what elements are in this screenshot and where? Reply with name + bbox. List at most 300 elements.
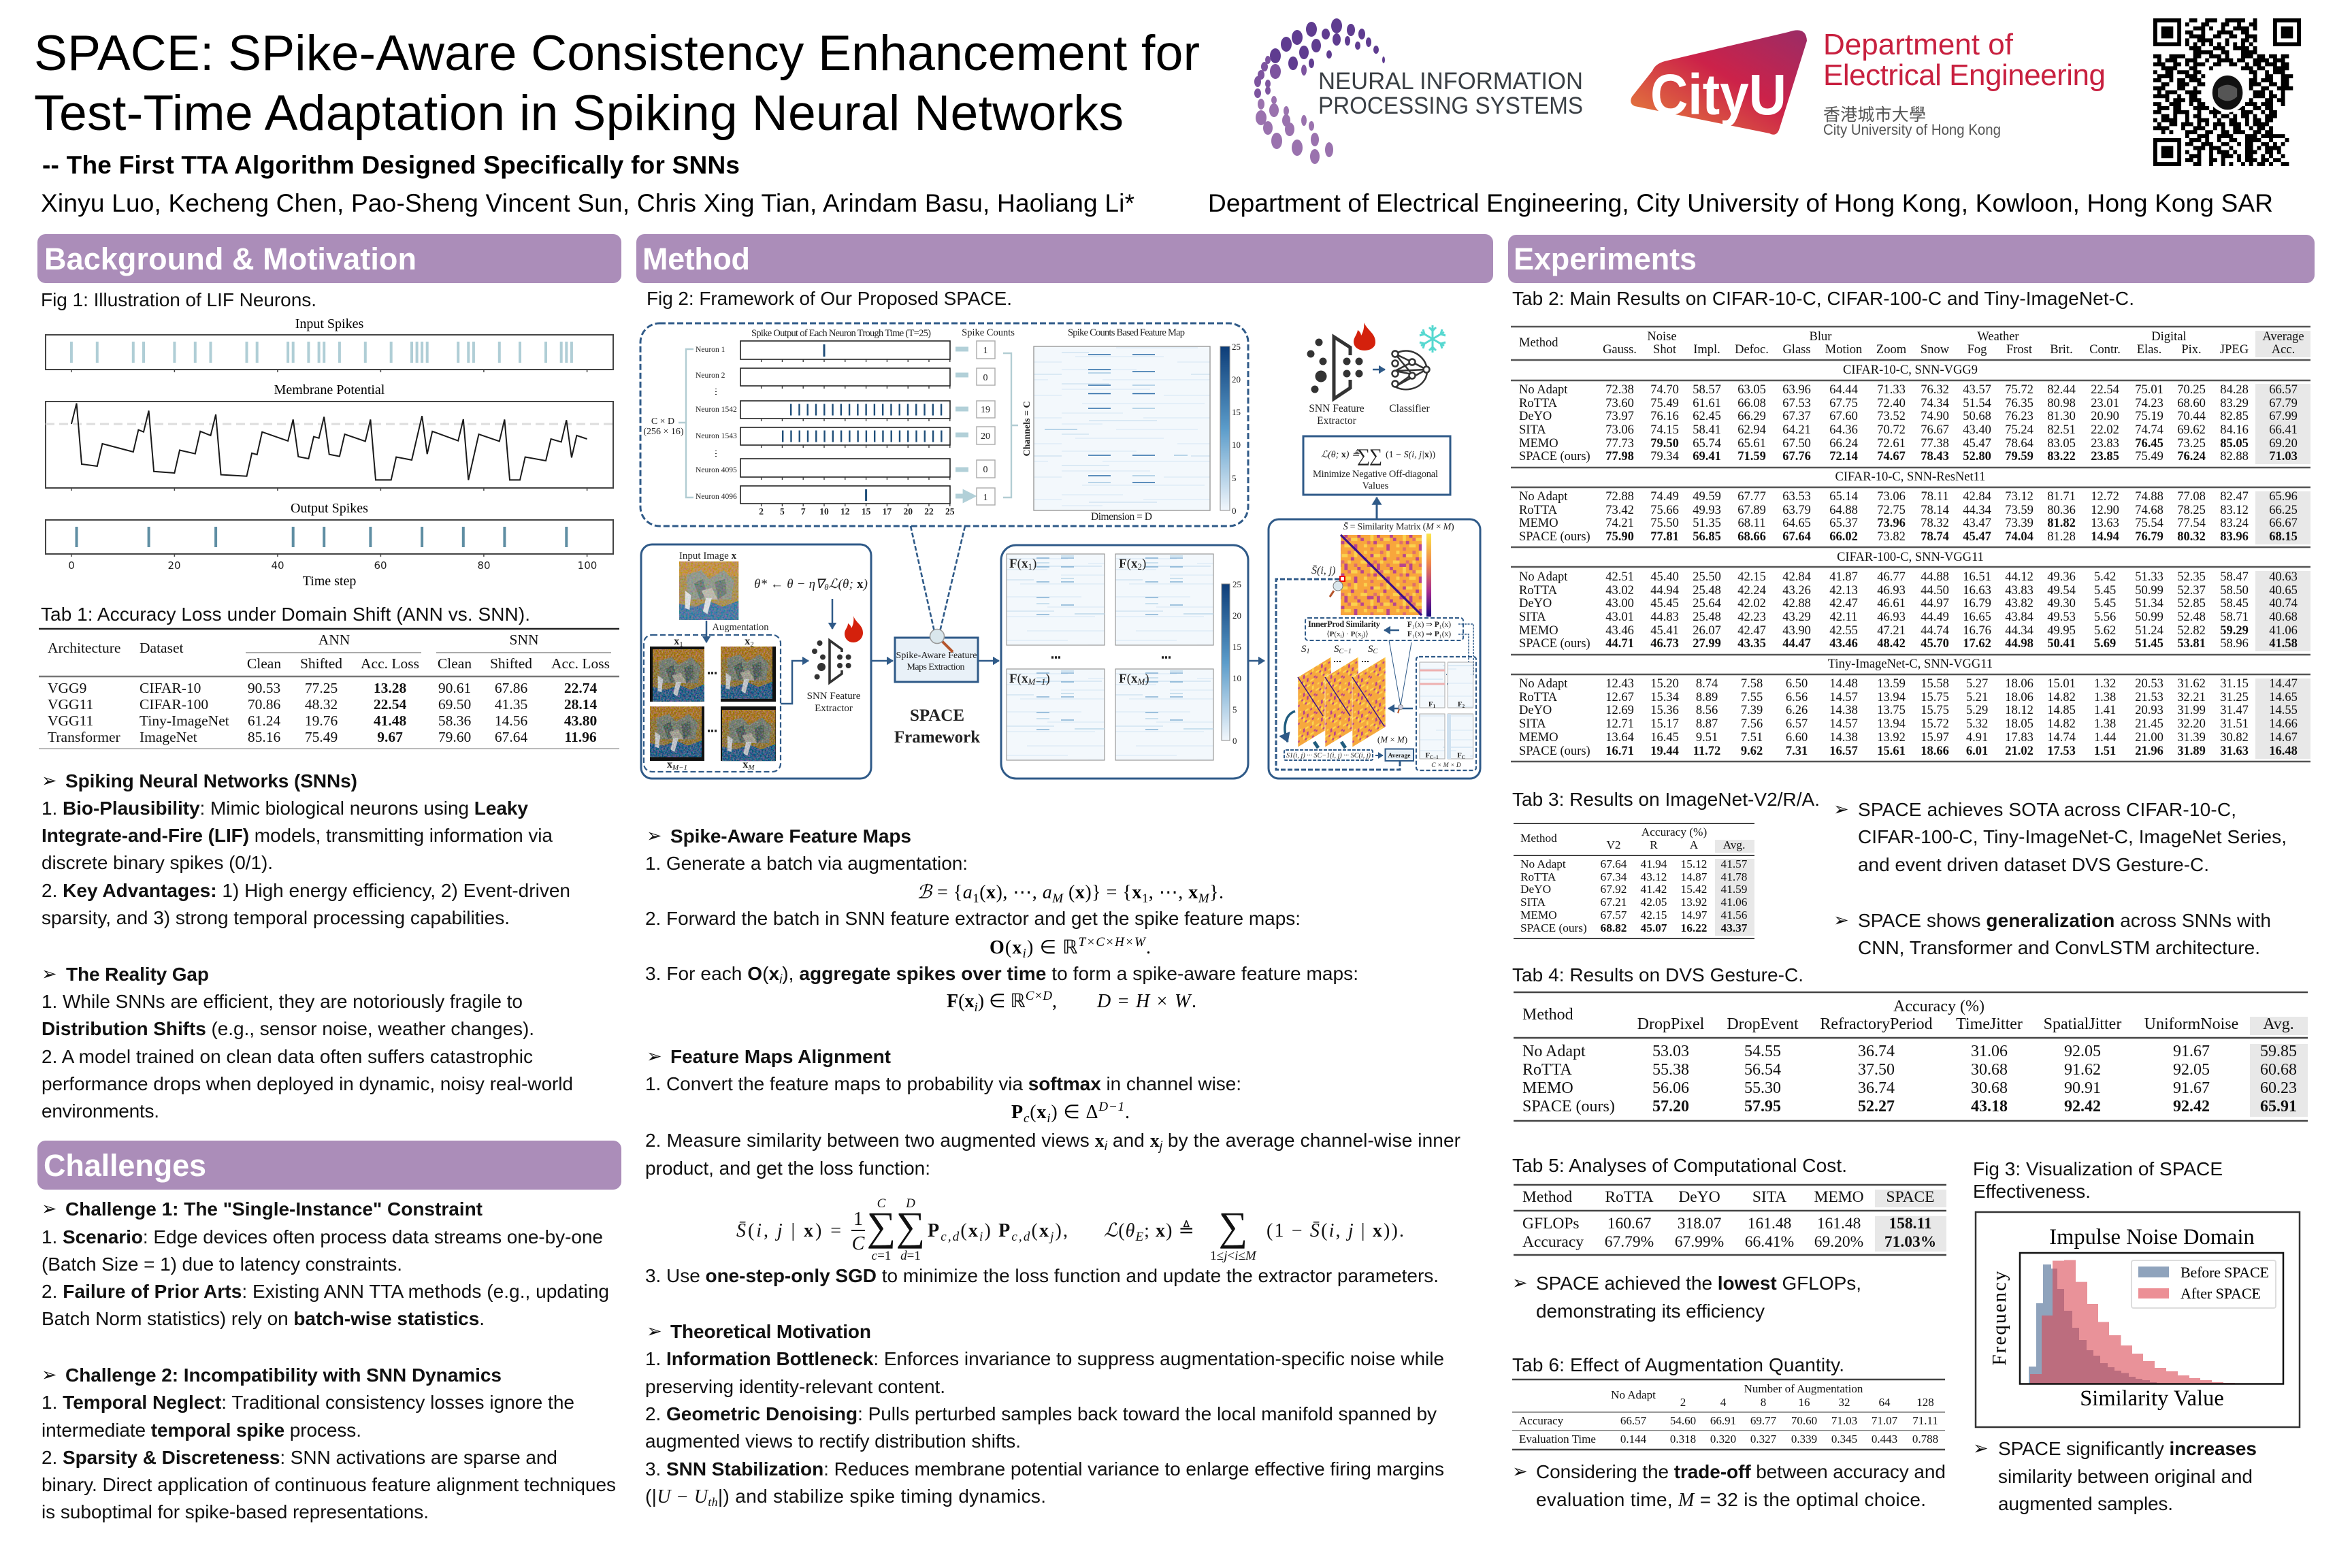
block: CIFAR-10-C VGG9: 76.35 bbox=[2005, 397, 2034, 410]
table 1: Architecture bbox=[48, 640, 120, 656]
text block: experiment findings: ➢ bbox=[1833, 799, 1849, 820]
text block: Spike-Aware Feature Maps: aggregate spikes over time to form a spike-aware feature maps: bbox=[799, 963, 1358, 984]
block: CIFAR-10-C ResNet11: 72.88 bbox=[1605, 490, 1634, 504]
text block: Challenge 2: Challenge 2: Incompatibility with SNN Dynamics bbox=[65, 1365, 502, 1386]
table 6: 128 bbox=[1916, 1396, 1934, 1409]
block: CIFAR-10-C VGG9: SPACE (ours) bbox=[1519, 450, 1590, 463]
table 3: 15.42 bbox=[1681, 883, 1707, 896]
table 3: 67.92 bbox=[1601, 883, 1627, 896]
table 2: Acc. bbox=[2272, 343, 2295, 357]
table 3 bbox=[1514, 823, 1754, 938]
block: CIFAR-100-C VGG11: 58.96 bbox=[2220, 637, 2249, 651]
table 2 bbox=[1511, 327, 2310, 762]
text block: Challenge 2: ➢ bbox=[42, 1365, 57, 1386]
text block: The Reality Gap: performance drops when deployed in dynamic, noisy real-world bbox=[42, 1073, 573, 1094]
panel: augmentation: Extractor bbox=[815, 703, 853, 714]
text block: Spike-Aware Feature Maps: }. bbox=[1209, 882, 1224, 903]
block: CIFAR-100-C VGG11: 42.47 bbox=[1737, 624, 1766, 638]
text block: Theoretical Motivation: 3. SNN Stabilization: Reduces membrane potential variance to enlarge effective firing margins bbox=[645, 1458, 1444, 1480]
table 5: MEMO bbox=[1814, 1188, 1864, 1206]
block: CIFAR-10-C VGG9: 73.60 bbox=[1605, 397, 1634, 410]
block: CIFAR-100-C VGG11: 40.63 bbox=[2269, 570, 2298, 584]
equation: similarity and loss: ; bbox=[1144, 1220, 1155, 1241]
block: CIFAR-10-C VGG9: 45.47 bbox=[1963, 437, 1991, 451]
panel: feature maps: ) bbox=[1142, 557, 1146, 571]
table 4: 57.20 bbox=[1652, 1098, 1689, 1115]
panel: spike output detail: 20 bbox=[981, 431, 990, 442]
table 5: 160.67 bbox=[1607, 1215, 1652, 1232]
table 3: 41.94 bbox=[1641, 858, 1667, 870]
box: loss: ∑ bbox=[1357, 445, 1370, 466]
block: CIFAR-100-C VGG11: 25.64 bbox=[1693, 597, 1721, 610]
panel: spike output detail bbox=[640, 323, 1248, 526]
block: CIFAR-10-C VGG9: 75.49 bbox=[2135, 450, 2163, 463]
header: Experiments: Experiments bbox=[1514, 242, 1697, 276]
block: CIFAR-100-C VGG11 bbox=[1519, 570, 2298, 651]
block: CIFAR-10-C VGG9: 67.75 bbox=[1829, 397, 1858, 410]
panel: augmentation: M bbox=[747, 764, 755, 772]
equation: similarity and loss: x bbox=[1039, 1220, 1049, 1241]
table 4: 92.05 bbox=[2173, 1061, 2210, 1079]
panel: spike output detail: 10 bbox=[819, 506, 829, 517]
table 6: 69.77 bbox=[1750, 1414, 1777, 1427]
table 4: 30.68 bbox=[1971, 1079, 2008, 1097]
text block: Feature Maps Alignment: 3. Use one-step-only SGD to minimize the loss function and update the extractor parameters. bbox=[645, 1265, 1439, 1286]
icons: feature extractor and classifier: Extractor bbox=[1317, 415, 1357, 427]
block: CIFAR-10-C VGG9: 76.16 bbox=[1650, 410, 1679, 423]
block: CIFAR-100-C VGG11: 25.48 bbox=[1693, 610, 1721, 624]
text block: Feature Maps Alignment: c bbox=[1024, 1111, 1030, 1126]
block: Tiny-ImageNet-C VGG11: 31.99 bbox=[2177, 704, 2206, 717]
table 3: 45.07 bbox=[1641, 921, 1667, 934]
block: Tiny-ImageNet-C VGG11: 31.39 bbox=[2177, 731, 2206, 745]
block: CIFAR-10-C VGG9: 71.59 bbox=[1737, 450, 1766, 463]
table 4: 60.23 bbox=[2260, 1079, 2297, 1097]
text block: Challenge 1: ➢ bbox=[42, 1198, 57, 1220]
panel: spike output detail: 1 bbox=[983, 346, 988, 356]
block: CIFAR-100-C VGG11: 42.15 bbox=[1737, 570, 1766, 584]
text block: Spiking Neural Networks: 1. Bio-Plausibility: Mimic biological neurons using Leaky bbox=[42, 798, 528, 819]
panel: similarity matrix: (M × M) bbox=[1377, 734, 1407, 745]
block: CIFAR-100-C VGG11: 58.71 bbox=[2220, 610, 2249, 624]
table 4: 92.05 bbox=[2064, 1043, 2101, 1060]
block: CIFAR-10-C ResNet11: 14.94 bbox=[2091, 530, 2119, 544]
block: CIFAR-10-C ResNet11: 78.32 bbox=[1921, 517, 1949, 530]
block: CIFAR-100-C VGG11: 42.47 bbox=[1829, 597, 1858, 610]
panel: augmentation: x bbox=[745, 636, 750, 647]
table 2: CIFAR-100-C, SNN-VGG11 bbox=[1837, 551, 1984, 564]
table 2: Elas. bbox=[2137, 343, 2161, 357]
block: CIFAR-100-C VGG11: 43.26 bbox=[1782, 584, 1811, 598]
text block: Spike-Aware Feature Maps: 1 bbox=[973, 892, 979, 906]
block: CIFAR-10-C VGG9 bbox=[1519, 383, 2298, 463]
block: Tiny-ImageNet-C VGG11: 19.44 bbox=[1650, 745, 1679, 758]
block: CIFAR-100-C VGG11: 44.34 bbox=[2005, 624, 2034, 638]
block: Tiny-ImageNet-C VGG11: 15.20 bbox=[1650, 677, 1679, 691]
equation: aggregated feature map: ) ∈ ℝ bbox=[978, 991, 1026, 1012]
equation: similarity and loss: E bbox=[1134, 1230, 1143, 1244]
block: CIFAR-10-C VGG9: 74.74 bbox=[2135, 423, 2163, 437]
text block: trade-off note: Considering the trade-off between accuracy and bbox=[1536, 1461, 1946, 1482]
block: Tiny-ImageNet-C VGG11: 17.83 bbox=[2005, 731, 2034, 745]
panel: spike output detail: C × D bbox=[651, 416, 674, 427]
chart title: output spikes: Output Spikes bbox=[291, 501, 368, 516]
block: CIFAR-10-C VGG9: 84.16 bbox=[2220, 423, 2249, 437]
block: CIFAR-10-C VGG9: 64.44 bbox=[1829, 383, 1858, 397]
box: loss: Minimize Negative Off-diagonal bbox=[1313, 469, 1438, 480]
block: CIFAR-10-C VGG9: 76.67 bbox=[1921, 423, 1949, 437]
block: CIFAR-10-C VGG9: 23.83 bbox=[2091, 437, 2119, 451]
block: CIFAR-10-C ResNet11: 73.82 bbox=[1877, 530, 1906, 544]
block: CIFAR-10-C VGG9: 69.62 bbox=[2177, 423, 2206, 437]
text block: Feature Maps Alignment: ➢ bbox=[647, 1046, 662, 1067]
block: CIFAR-100-C VGG11: 46.93 bbox=[1877, 584, 1906, 598]
table 1: 43.80 bbox=[564, 713, 597, 729]
block: CIFAR-10-C VGG9: 22.02 bbox=[2091, 423, 2119, 437]
table 4: RefractoryPeriod bbox=[1820, 1015, 1933, 1033]
text block: experiment findings: SPACE achieves SOTA across CIFAR-10-C, bbox=[1858, 799, 2236, 820]
block: CIFAR-100-C VGG11: 45.45 bbox=[1650, 597, 1679, 610]
text block: Spike-Aware Feature Maps: 2. Forward the batch in SNN feature extractor and get the spike feature maps: bbox=[645, 908, 1301, 929]
block: CIFAR-100-C VGG11: 40.74 bbox=[2269, 597, 2298, 610]
block: CIFAR-100-C VGG11: 44.71 bbox=[1605, 637, 1634, 651]
panel: spike output detail: Channels = C bbox=[1022, 401, 1032, 457]
panel: similarity matrix: ) · bbox=[1342, 630, 1351, 638]
block: CIFAR-10-C ResNet11: 64.65 bbox=[1782, 517, 1811, 530]
table 5: 69.20% bbox=[1814, 1233, 1863, 1251]
table 3: DeYO bbox=[1520, 883, 1551, 896]
equation: aggregated feature map bbox=[947, 989, 1196, 1015]
text block: GFLOPs note: demonstrating its efficiency bbox=[1536, 1301, 1765, 1322]
table 4: No Adapt bbox=[1522, 1043, 1586, 1060]
block: CIFAR-100-C VGG11: 42.51 bbox=[1605, 570, 1634, 584]
table 1: Clean bbox=[438, 655, 472, 672]
block: CIFAR-10-C VGG9: 75.19 bbox=[2135, 410, 2163, 423]
text block: Feature Maps Alignment: . bbox=[1125, 1102, 1130, 1123]
panel: spike output detail: 5 bbox=[780, 506, 785, 517]
table 2: Noise bbox=[1647, 330, 1677, 344]
table 1: 85.16 bbox=[248, 729, 280, 745]
block: CIFAR-10-C VGG9: 75.72 bbox=[2005, 383, 2034, 397]
block: CIFAR-100-C VGG11: 51.45 bbox=[2135, 637, 2163, 651]
table 4: RoTTA bbox=[1522, 1061, 1572, 1079]
table 1: 70.86 bbox=[248, 696, 280, 713]
table 3: Avg. bbox=[1723, 838, 1745, 851]
block: CIFAR-100-C VGG11: 53.81 bbox=[2177, 637, 2206, 651]
block: Tiny-ImageNet-C VGG11: MEMO bbox=[1519, 731, 1558, 745]
table 1: Transformer bbox=[48, 729, 120, 745]
panel: spike output detail: 12 bbox=[840, 506, 850, 517]
table 2: CIFAR-10-C, SNN-ResNet11 bbox=[1835, 470, 1985, 484]
block: CIFAR-10-C ResNet11: 82.47 bbox=[2220, 490, 2249, 504]
department text bbox=[1823, 28, 2106, 92]
table 1: ImageNet bbox=[140, 729, 197, 745]
panel: similarity matrix: S bbox=[1301, 644, 1307, 655]
text block: Feature Maps Alignment bbox=[645, 1046, 1460, 1286]
table 4: 37.50 bbox=[1858, 1061, 1895, 1079]
QR code bbox=[2153, 18, 2301, 166]
equation: similarity and loss: d=1 bbox=[900, 1249, 921, 1263]
logo: NeurIPS: PROCESSING SYSTEMS bbox=[1318, 93, 1583, 119]
panel: spike output detail: 0 bbox=[983, 373, 988, 383]
text block: experiment findings: and event driven dataset DVS Gesture-C. bbox=[1858, 854, 2209, 875]
block: Tiny-ImageNet-C VGG11: 20.53 bbox=[2135, 677, 2163, 691]
panel: spike output detail: 1 bbox=[983, 493, 988, 503]
text block: Challenge 2: 1. Temporal Neglect: Traditional consistency losses ignore the bbox=[42, 1392, 574, 1413]
block: CIFAR-100-C VGG11: 42.13 bbox=[1829, 584, 1858, 598]
table 2: Defoc. bbox=[1735, 343, 1769, 357]
diagram: SPACE framework bbox=[640, 323, 1480, 779]
block: CIFAR-10-C VGG9: 74.34 bbox=[1921, 397, 1949, 410]
block: Tiny-ImageNet-C VGG11: 11.72 bbox=[1693, 745, 1720, 758]
block: CIFAR-10-C VGG9: 82.44 bbox=[2047, 383, 2076, 397]
block: CIFAR-100-C VGG11: 43.29 bbox=[1782, 610, 1811, 624]
panel: spike output detail: 25 bbox=[1232, 342, 1241, 352]
block: CIFAR-10-C VGG9: 23.85 bbox=[2091, 450, 2119, 463]
table 4 bbox=[1514, 992, 2308, 1121]
table 3: Accuracy (%) bbox=[1642, 826, 1707, 838]
block: Tiny-ImageNet-C VGG11: 12.71 bbox=[1605, 717, 1634, 731]
block: Tiny-ImageNet-C VGG11: 18.06 bbox=[2005, 677, 2034, 691]
table 4: Method bbox=[1522, 1006, 1573, 1024]
panel: feature maps: ) bbox=[1145, 672, 1149, 686]
text block: Spike-Aware Feature Maps: . bbox=[1146, 937, 1151, 958]
block: Tiny-ImageNet-C VGG11: 12.67 bbox=[1605, 691, 1634, 704]
block: CIFAR-100-C VGG11: 52.85 bbox=[2177, 597, 2206, 610]
table 6: 66.91 bbox=[1710, 1414, 1736, 1427]
table 4: 57.95 bbox=[1744, 1098, 1781, 1115]
block: CIFAR-100-C VGG11: 16.79 bbox=[1963, 597, 1991, 610]
panel: feature maps: 20 bbox=[1232, 610, 1241, 621]
block: CIFAR-10-C ResNet11: 80.36 bbox=[2047, 504, 2076, 517]
panel: membrane potential bbox=[46, 402, 613, 491]
block: Tiny-ImageNet-C VGG11: 13.92 bbox=[1877, 731, 1906, 745]
table 5: SPACE bbox=[1886, 1188, 1934, 1206]
block: CIFAR-100-C VGG11: 44.83 bbox=[1650, 610, 1679, 624]
label: SPACE Framework: SPACE bbox=[910, 706, 964, 725]
equation: aggregated feature map: , bbox=[1052, 991, 1057, 1012]
block: Tiny-ImageNet-C VGG11: 15.72 bbox=[1921, 717, 1949, 731]
panel: augmentation: M−1 bbox=[672, 764, 687, 772]
table 6: 64 bbox=[1878, 1396, 1891, 1409]
panel: spike output detail: 20 bbox=[1232, 374, 1241, 385]
block: CIFAR-100-C VGG11: 5.45 bbox=[2094, 597, 2116, 610]
table 4: 60.68 bbox=[2260, 1061, 2297, 1079]
block: CIFAR-10-C VGG9: 76.32 bbox=[1921, 383, 1949, 397]
text block: Feature Maps Alignment: x bbox=[1036, 1102, 1046, 1123]
block: Tiny-ImageNet-C VGG11: 7.31 bbox=[1786, 745, 1808, 758]
block: CIFAR-10-C VGG9: 65.74 bbox=[1693, 437, 1721, 451]
table 1: 13.28 bbox=[374, 680, 406, 696]
block: CIFAR-10-C ResNet11: 83.96 bbox=[2220, 530, 2249, 544]
block: Tiny-ImageNet-C VGG11: 7.39 bbox=[1741, 704, 1763, 717]
table 3: RoTTA bbox=[1520, 870, 1556, 883]
block: CIFAR-10-C ResNet11: 67.89 bbox=[1737, 504, 1766, 517]
block: Tiny-ImageNet-C VGG11: 15.61 bbox=[1877, 745, 1906, 758]
block: Tiny-ImageNet-C VGG11: 13.75 bbox=[1877, 704, 1906, 717]
block: CIFAR-10-C VGG9: 77.98 bbox=[1605, 450, 1634, 463]
table 2: Shot bbox=[1653, 343, 1677, 357]
block: CIFAR-10-C ResNet11: 67.64 bbox=[1782, 530, 1811, 544]
icons: feature extractor and classifier bbox=[1307, 323, 1446, 427]
table 1: 58.36 bbox=[438, 713, 471, 729]
text block: Spiking Neural Networks: 2. Key Advantages: 1) High energy efficiency, 2) Event-driven bbox=[42, 880, 570, 901]
block: Tiny-ImageNet-C VGG11: 8.74 bbox=[1696, 677, 1718, 691]
block: CIFAR-10-C ResNet11: 45.47 bbox=[1963, 530, 1991, 544]
block: CIFAR-10-C ResNet11: 74.68 bbox=[2135, 504, 2163, 517]
block: Tiny-ImageNet-C VGG11: 6.60 bbox=[1786, 731, 1808, 745]
text block: Feature Maps Alignment: 1. Convert the feature maps to probability via softmax in channel wise: bbox=[645, 1073, 1241, 1094]
equation: similarity and loss: c=1 bbox=[872, 1249, 891, 1263]
table 4: 31.06 bbox=[1971, 1043, 2008, 1060]
panel: similarity matrix: 2 bbox=[1463, 704, 1465, 709]
block: CIFAR-10-C VGG9: 74.90 bbox=[1921, 410, 1949, 423]
text block: Spike-Aware Feature Maps: ➢ bbox=[647, 826, 662, 847]
block: CIFAR-100-C VGG11: 42.23 bbox=[1737, 610, 1766, 624]
text block: Challenge 1: 1. Scenario: Edge devices often process data streams one-by-one bbox=[42, 1226, 603, 1247]
block: CIFAR-10-C VGG9: 67.60 bbox=[1829, 410, 1858, 423]
block: Tiny-ImageNet-C VGG11: 21.00 bbox=[2135, 731, 2163, 745]
block: CIFAR-10-C VGG9: 84.28 bbox=[2220, 383, 2249, 397]
block: Tiny-ImageNet-C VGG11: 1.38 bbox=[2094, 717, 2116, 731]
block: CIFAR-10-C VGG9: 74.23 bbox=[2135, 397, 2163, 410]
block: CIFAR-10-C ResNet11: 76.79 bbox=[2135, 530, 2163, 544]
table 5: 158.11 bbox=[1889, 1215, 1932, 1232]
block: CIFAR-10-C ResNet11: 81.71 bbox=[2047, 490, 2076, 504]
block: CIFAR-10-C VGG9: 76.24 bbox=[2177, 450, 2206, 463]
block: CIFAR-10-C ResNet11: 49.59 bbox=[1693, 490, 1721, 504]
text block: Feature Maps Alignment: ) ∈ Δ bbox=[1051, 1102, 1098, 1123]
block: CIFAR-10-C VGG9: 66.57 bbox=[2269, 383, 2298, 397]
icons: feature extractor and classifier: SNN Feature bbox=[1309, 403, 1365, 414]
block: Tiny-ImageNet-C VGG11: 15.36 bbox=[1650, 704, 1679, 717]
block: Tiny-ImageNet-C VGG11: 6.56 bbox=[1786, 691, 1808, 704]
equation: similarity and loss: i bbox=[979, 1230, 983, 1244]
text block: Feature Maps Alignment: 2. Measure similarity between two augmented views x bbox=[645, 1130, 1105, 1152]
panel: similarity matrix: F bbox=[1425, 751, 1430, 760]
text block: Feature Maps Alignment: D−1 bbox=[1098, 1100, 1124, 1114]
equation: similarity and loss: ) bbox=[984, 1220, 997, 1241]
block: CIFAR-10-C VGG9: DeYO bbox=[1519, 410, 1552, 423]
block: CIFAR-100-C VGG11: 44.97 bbox=[1921, 597, 1949, 610]
caption: Tab 1: Tab 1: Accuracy Loss under Domain Shift (ANN vs. SNN). bbox=[41, 604, 530, 625]
equation: similarity and loss: j bbox=[1048, 1230, 1054, 1244]
department text: Electrical Engineering bbox=[1823, 59, 2106, 92]
authors: Xinyu Luo, Kecheng Chen, Pao-Sheng Vincent Sun, Chris Xing Tian, Arindam Basu, Haoliang Li* bbox=[41, 189, 1134, 217]
table 1: 69.50 bbox=[438, 696, 471, 713]
panel: feature maps: 2 bbox=[1137, 561, 1142, 572]
label: SPACE Framework: Framework bbox=[894, 728, 980, 747]
block: CIFAR-10-C ResNet11: 77.08 bbox=[2177, 490, 2206, 504]
text block: Feature Maps Alignment: i bbox=[1047, 1111, 1051, 1126]
panel: feature maps: M bbox=[1137, 676, 1145, 687]
block: Tiny-ImageNet-C VGG11: 7.51 bbox=[1741, 731, 1763, 745]
block: CIFAR-10-C ResNet11: 78.25 bbox=[2177, 504, 2206, 517]
panel: similarity matrix: InnerProd Similarity bbox=[1308, 619, 1381, 629]
table 6: Evaluation Time bbox=[1519, 1433, 1596, 1446]
block: Tiny-ImageNet-C VGG11: 14.48 bbox=[1829, 677, 1858, 691]
block: CIFAR-10-C VGG9: 69.41 bbox=[1693, 450, 1721, 463]
block: CIFAR-10-C VGG9: 75.49 bbox=[1650, 397, 1679, 410]
panel: feature maps: F(x bbox=[1119, 557, 1137, 571]
block: CIFAR-10-C VGG9: 66.29 bbox=[1737, 410, 1766, 423]
block: Tiny-ImageNet-C VGG11: 15.75 bbox=[1921, 691, 1949, 704]
table 1: 77.25 bbox=[305, 680, 338, 696]
text block: Spike-Aware Feature Maps: Spike-Aware Feature Maps bbox=[670, 826, 911, 847]
text block: Spike-Aware Feature Maps: , ⋯, bbox=[1149, 882, 1188, 903]
block: CIFAR-10-C ResNet11: 66.25 bbox=[2269, 504, 2298, 517]
table 5: DeYO bbox=[1678, 1188, 1720, 1206]
block: CIFAR-10-C ResNet11: 64.88 bbox=[1829, 504, 1858, 517]
block: Tiny-ImageNet-C VGG11: 15.97 bbox=[1921, 731, 1949, 745]
block: CIFAR-10-C VGG9: 80.98 bbox=[2047, 397, 2076, 410]
block: Tiny-ImageNet-C VGG11: 14.82 bbox=[2047, 691, 2076, 704]
block: CIFAR-100-C VGG11: 42.11 bbox=[1830, 610, 1857, 624]
text block: Spike-Aware Feature Maps: x), ⋯, a bbox=[986, 882, 1052, 903]
table 1: Acc. Loss bbox=[361, 655, 419, 672]
chart: LIF neuron figure bbox=[46, 316, 613, 589]
block: Tiny-ImageNet-C VGG11: 32.20 bbox=[2177, 717, 2206, 731]
table 2: JPEG bbox=[2220, 343, 2249, 357]
text block: Challenge 2: intermediate temporal spike process. bbox=[42, 1420, 361, 1441]
table 5: SITA bbox=[1752, 1188, 1786, 1206]
table 3: 15.12 bbox=[1681, 858, 1707, 870]
panel: similarity matrix: 1 bbox=[1307, 648, 1309, 655]
block: CIFAR-10-C ResNet11: SPACE (ours) bbox=[1519, 530, 1590, 544]
caption: Tab 2: Tab 2: Main Results on CIFAR-10-C, CIFAR-100-C and Tiny-ImageNet-C. bbox=[1512, 288, 2134, 309]
block: Tiny-ImageNet-C VGG11: 12.69 bbox=[1605, 704, 1634, 717]
block: CIFAR-10-C VGG9: 62.94 bbox=[1737, 423, 1766, 437]
block: Tiny-ImageNet-C VGG11: 16.57 bbox=[1829, 745, 1858, 758]
box: spike-aware feature maps extraction: Spike-Aware Feature bbox=[896, 651, 977, 661]
block: CIFAR-10-C ResNet11: 78.14 bbox=[1921, 504, 1949, 517]
block: CIFAR-100-C VGG11: 26.07 bbox=[1693, 624, 1721, 638]
table 5 bbox=[1514, 1185, 1946, 1255]
text block: Feature Maps Alignment: and bbox=[1107, 1130, 1150, 1151]
block: CIFAR-100-C VGG11: 46.93 bbox=[1877, 610, 1906, 624]
text block: The Reality Gap: Distribution Shifts (e.g., sensor noise, weather changes). bbox=[42, 1018, 534, 1039]
block: CIFAR-10-C VGG9: 64.21 bbox=[1782, 423, 1811, 437]
block: CIFAR-10-C ResNet11: 56.85 bbox=[1693, 530, 1721, 544]
table 6: 0.345 bbox=[1831, 1433, 1857, 1446]
text block: experiment findings: CNN, Transformer and ConvLSTM architecture. bbox=[1858, 937, 2260, 958]
panel: augmentation: Augmentation bbox=[713, 622, 769, 633]
table 3: 41.57 bbox=[1721, 858, 1748, 870]
panel: similarity matrix: F₁(x) ⇒ P₁(x) bbox=[1407, 630, 1451, 638]
text block: Challenge 2: 2. Sparsity & Discreteness: SNN activations are sparse and bbox=[42, 1447, 557, 1468]
block: CIFAR-100-C VGG11: 44.49 bbox=[1921, 610, 1949, 624]
block: CIFAR-10-C ResNet11: No Adapt bbox=[1519, 490, 1568, 504]
block: CIFAR-10-C VGG9: 74.67 bbox=[1877, 450, 1906, 463]
block: CIFAR-100-C VGG11: 49.95 bbox=[2047, 624, 2076, 638]
table 1: 61.24 bbox=[248, 713, 280, 729]
table 6: 2 bbox=[1680, 1396, 1686, 1409]
block: CIFAR-10-C VGG9: 78.43 bbox=[1921, 450, 1949, 463]
equation: similarity and loss: P bbox=[928, 1220, 939, 1241]
caption: Fig 2: Fig 2: Framework of Our Proposed SPACE. bbox=[647, 288, 1012, 309]
table 2: Brit. bbox=[2050, 343, 2073, 357]
panel: similarity matrix: S bbox=[1334, 644, 1339, 655]
table 1: 67.64 bbox=[495, 729, 527, 745]
table 6: 8 bbox=[1761, 1396, 1766, 1409]
block: Tiny-ImageNet-C VGG11: 31.25 bbox=[2220, 691, 2249, 704]
text block: Theoretical Motivation: |) and stabilize spike timing dynamics. bbox=[718, 1486, 1046, 1507]
equation: aggregated feature map: D = H × W. bbox=[1096, 991, 1196, 1012]
panel: feature maps: 15 bbox=[1232, 642, 1241, 652]
block: Tiny-ImageNet-C VGG11: 9.62 bbox=[1741, 745, 1763, 758]
text block: The Reality Gap: 1. While SNNs are efficient, they are notoriously fragile to bbox=[42, 991, 523, 1012]
block: Tiny-ImageNet-C VGG11: 20.93 bbox=[2135, 704, 2163, 717]
